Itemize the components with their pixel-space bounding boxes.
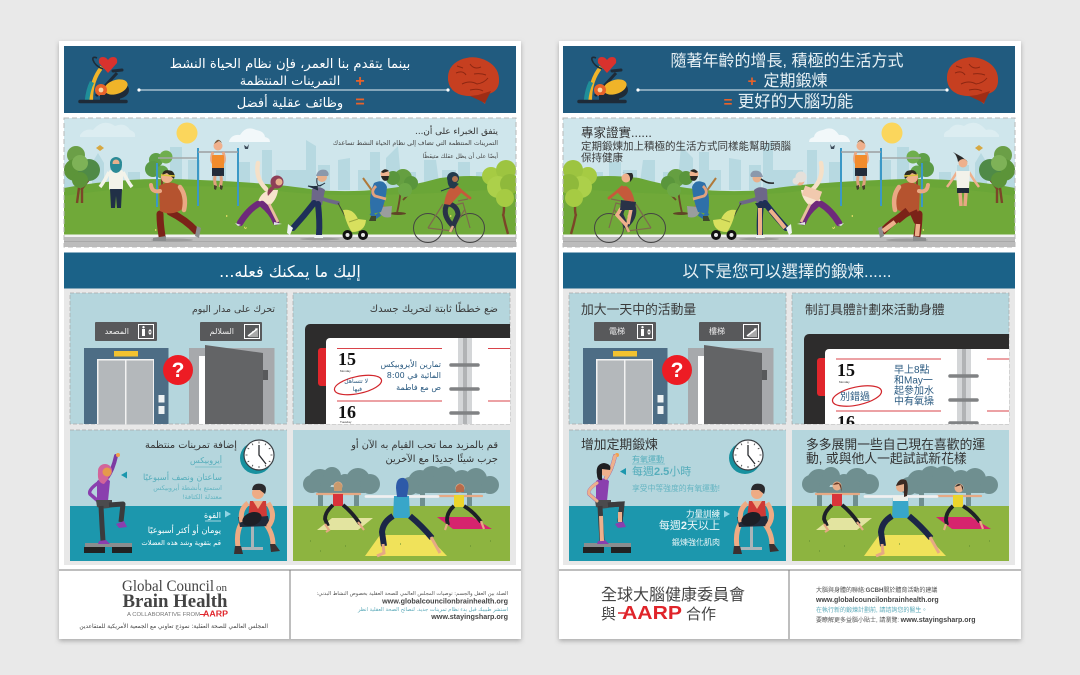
park scene [64,118,520,247]
header text: = [355,94,365,111]
planner [305,324,510,424]
strength text: القوة [204,511,221,520]
logo: Global Council on Brain Health: A COLLABORATIVE FROM [127,612,200,618]
logo: Global Council on Brain Health: on [216,582,228,594]
header text [137,57,450,111]
header text: 定期鍛煉 [763,72,828,90]
header text: التمرينات المنتظمة [240,74,340,89]
panel heading [350,438,498,465]
elevator or stairs [84,322,274,424]
logo: Global Council on Brain Health with AARP: 與 [601,606,616,623]
footer [59,570,521,639]
panel: add regular exercise [70,430,287,561]
planner: 16 [338,402,356,422]
footer resources [815,586,975,624]
planner: ص مع فاطمة [396,383,441,392]
strength text [659,509,730,547]
footer resources: www.globalcouncilonbrainhealth.org [815,597,939,604]
elevator or stairs: المصعد [105,327,129,336]
icon: exercise bike [579,57,629,102]
icon: clock [240,440,274,474]
elevator or stairs: 電梯 [609,326,625,336]
planner: 中有氧操 [894,394,934,408]
aerobics figure [84,453,132,553]
logo: Global Council on Brain Health: Global Council [122,578,214,595]
Arabic poster [59,41,525,639]
yoga scene [792,430,1009,561]
aerobic text: معتدلة الكثافة! [182,493,222,501]
aerobic text: 每週2.5小時 [632,464,691,478]
scene text: يتفق الخبراء على أن... [415,125,499,137]
planner [804,334,1009,424]
strength text: 每週2天以上 [659,518,720,532]
strength text: 力量訓練 [686,509,720,519]
strength text: 鍛煉強化肌肉 [672,537,720,547]
header text: + [355,73,365,90]
header text: وظائف عقلية أفضل [237,94,343,111]
section heading [64,252,516,288]
logo: Global Council on Brain Health [79,578,268,630]
strength text [141,510,231,547]
planner: لا تتساهل [344,378,368,385]
panel heading: قم بالمزيد مما تحب القيام به الآن أو [350,438,498,451]
panel heading: جرب شيئًا جديدًا مع الآخرين [386,452,498,465]
elevator or stairs: السلالم [210,327,234,336]
park scene [559,118,1015,247]
elevator or stairs: 樓梯 [709,326,725,336]
panel: try something new [293,430,510,561]
planner: 15 [338,349,356,369]
footer resources: www.globalcouncilonbrainhealth.org [381,596,508,606]
logo: Global Council on Brain Health with AARP: 全球大腦健康委員會 [601,586,745,604]
header text: بينما يتقدم بنا العمر، فإن نظام الحياة النشط [170,57,410,72]
scene text: 專家證實...... [581,125,652,140]
panel: move throughout the day [70,293,287,424]
header banner [563,46,1015,113]
strength text: قم بتقوية وشد هذه العضلات [141,539,221,547]
panel: add regular exercise: 增加定期鍛煉 [581,437,658,452]
aerobic text: ساعتان ونصف أسبوعيًا [143,471,222,482]
panel heading: 多多展開一些自己現在喜歡的運 [806,437,985,452]
panel: more activity through the day [569,293,786,424]
planner: 起參加水 [894,384,934,397]
aerobic text [620,454,720,493]
section heading: إليك ما يمكنك فعله... [219,262,361,281]
logo: Global Council on Brain Health with AARP: 合作 [686,606,716,623]
aerobic text: 有氧運動 [632,454,664,464]
Chinese poster [559,41,1024,639]
planner: فيها [353,386,362,393]
footer resources: www.stayingsharp.org [430,612,508,621]
activities section [563,252,1024,565]
footer resources: 在執行新的鍛煉計劃前, 請諮詢您的醫生。 [816,606,927,614]
activities section [64,252,525,565]
footer resources [317,591,508,621]
strength training figure [733,484,779,554]
elevator or stairs [583,322,774,424]
planner: 16 [837,412,855,432]
header text: 隨著年齡的增長, 積極的生活方式 [671,52,903,70]
panel: make a plan: ضع خططًا ثابتة لتحريك جسدك [370,301,498,315]
icon: exercise bike [80,57,130,102]
panel: move throughout the day: تحرك على مدار اليوم [192,304,275,315]
planner: 15 [837,360,855,380]
panel: make a plan [792,292,1010,424]
page shadows [59,43,1021,641]
logo: Global Council on Brain Health: المجلس العالمي للصحة العقلية: نموذج تعاوني مع الجمعية الأمريكية للمتقاعدين [79,622,268,630]
planner: المائية في 8:00 [387,371,441,380]
icon: brain [947,57,998,104]
strength training figure [234,484,280,554]
icon: clock [729,440,763,474]
header text [636,52,949,111]
planner: تمارين الأيروبيكس [380,359,441,369]
footer resources: 要瞭解更多益腦小貼士, 請瀏覽: www.stayingsharp.org [816,616,975,624]
scene text: التمرينات المنتظمة التي تضاف إلى نظام الحياة النشط تساعدك [333,140,498,147]
panel: add regular exercise [569,430,786,561]
header text: = [724,94,733,111]
planner: Tuesday [340,420,352,424]
scene text: 保持健康 [581,151,623,164]
panel: make a plan: 制訂具體計劃來活動身體 [805,302,945,317]
icon: brain [448,57,499,104]
planner: Monday [340,369,351,373]
panel heading [806,437,985,466]
panel: try something new [792,430,1009,561]
aerobic text: استمتع بأنشطة أيروبيكس [153,483,222,492]
scene text [333,125,499,160]
scene text: أيضًا على أن يظل عقلك متيقظًا [423,152,498,160]
yoga scene [293,430,510,561]
footer resources: استشر طبيبك قبل بدء نظام تمرينات جديد. لنصائح الصحة العقلية انظر [357,607,508,613]
section heading [563,252,1015,288]
panel heading: 動, 或與他人一起試試新花樣 [806,451,967,466]
scene text [581,125,791,164]
footer [559,570,1021,639]
scene text: 定期鍛煉加上積極的生活方式同樣能幫助頭腦 [581,140,791,152]
aerobic text [121,455,222,501]
planner: 早上8點 [894,364,930,376]
planner: 和May一 [894,374,933,386]
planner: Monday [839,380,850,384]
aerobic text: 享受中等強度的有氧運動! [632,483,720,493]
panel: add regular exercise: إضافة تمرينات منتظمة [145,440,237,451]
logo: Global Council on Brain Health with AARP [601,586,745,623]
strength text: يومان أو أكثر أسبوعيًا [148,524,222,535]
aerobic text: أيروبيكس [190,455,222,465]
section heading: 以下是您可以選擇的鍛煉...... [682,262,892,281]
logo: Global Council on Brain Health: AARP [203,610,229,618]
header banner [64,46,516,113]
planner: 別錯過 [840,390,870,403]
logo: Global Council on Brain Health with AARP: AARP [622,603,682,623]
aerobics figure [583,453,631,553]
panel: more activity through the day: 加大一天中的活動量 [581,302,696,317]
header text: 更好的大腦功能 [738,92,853,111]
footer resources: 大腦與身體的聯絡:GCBH關於體育活動的建議 [816,586,937,594]
logo: Global Council on Brain Health: Brain Health [122,591,228,612]
header text: + [748,73,757,90]
panel: make a plan [292,292,510,424]
footer resources: الصلة بين العقل والجسم: توصيات المجلس العالمي للصحة العقلية بخصوص النشاط البدني: [317,591,508,597]
